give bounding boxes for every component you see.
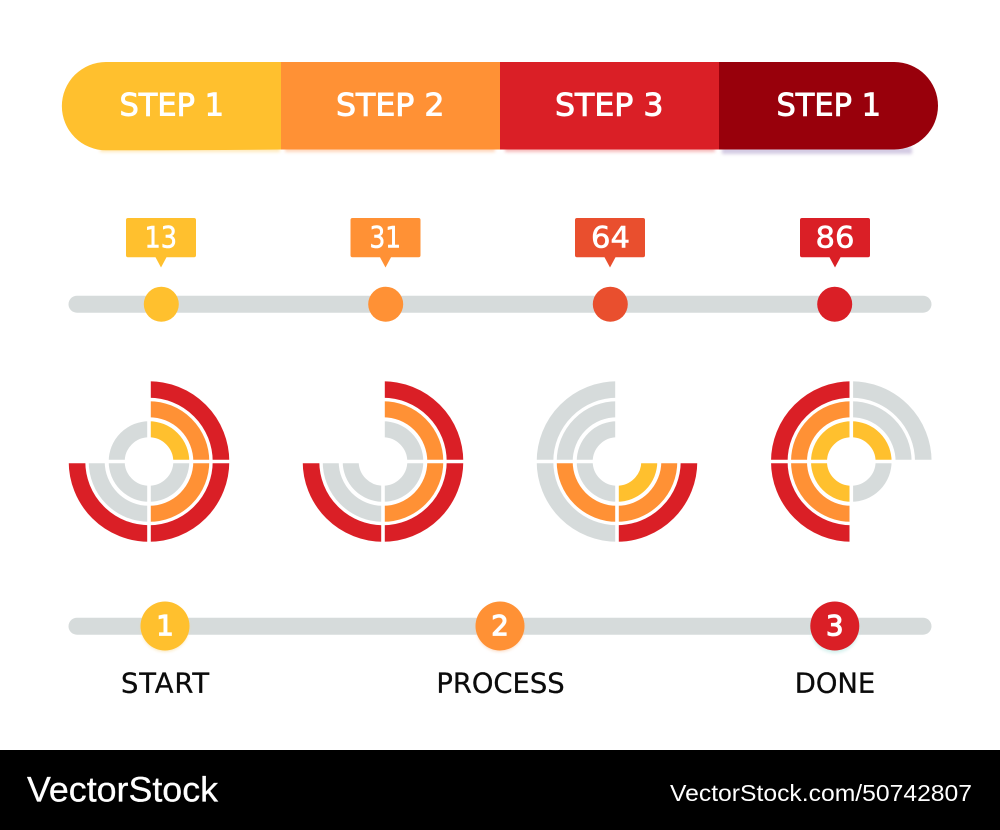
step segment: step 3 red xyxy=(500,62,719,150)
timeline track xyxy=(68,618,932,635)
footer logo text: VectorStock xyxy=(27,770,219,810)
stage 1: start xyxy=(121,602,210,699)
radial chart 2 xyxy=(297,376,469,548)
footer url text: VectorStock.com/50742807 xyxy=(670,780,972,806)
progress slider with value callouts xyxy=(68,218,932,322)
marker: 64 xyxy=(575,218,645,322)
marker: 13 xyxy=(126,218,196,322)
marker: 64: 64 xyxy=(591,220,630,254)
marker: 86: 86 xyxy=(816,220,854,254)
stage timeline xyxy=(68,602,932,699)
stage 2: process: PROCESS xyxy=(436,668,565,699)
step bar xyxy=(62,62,938,154)
step segment: step 1 yellow: STEP 1 xyxy=(120,88,224,124)
marker: 13: 13 xyxy=(144,220,177,254)
stage 1: start: 1 xyxy=(156,610,174,642)
step segment: step 2 orange xyxy=(281,62,500,150)
radial chart 4 xyxy=(765,376,937,548)
step segment: step 1 yellow xyxy=(62,62,281,150)
step segment: step 1 dark red: STEP 1 xyxy=(776,88,881,124)
step segment: step 2 orange: STEP 2 xyxy=(336,88,444,124)
radial chart 3 xyxy=(531,376,703,548)
marker: 31 xyxy=(350,218,420,322)
step segment: step 1 dark red xyxy=(719,62,938,150)
stage 3: done: DONE xyxy=(795,668,875,699)
stage 2: process xyxy=(436,602,565,699)
marker: 86 xyxy=(800,218,870,322)
stage 1: start: START xyxy=(121,668,210,699)
slider track xyxy=(68,296,932,313)
marker: 31: 31 xyxy=(370,220,401,254)
stage 2: process: 2 xyxy=(491,610,509,642)
step segment: step 3 red: STEP 3 xyxy=(555,88,664,124)
stage 3: done: 3 xyxy=(826,610,844,642)
footer band xyxy=(0,750,1000,830)
radial chart 1 xyxy=(63,376,235,548)
stage 3: done xyxy=(795,602,875,699)
